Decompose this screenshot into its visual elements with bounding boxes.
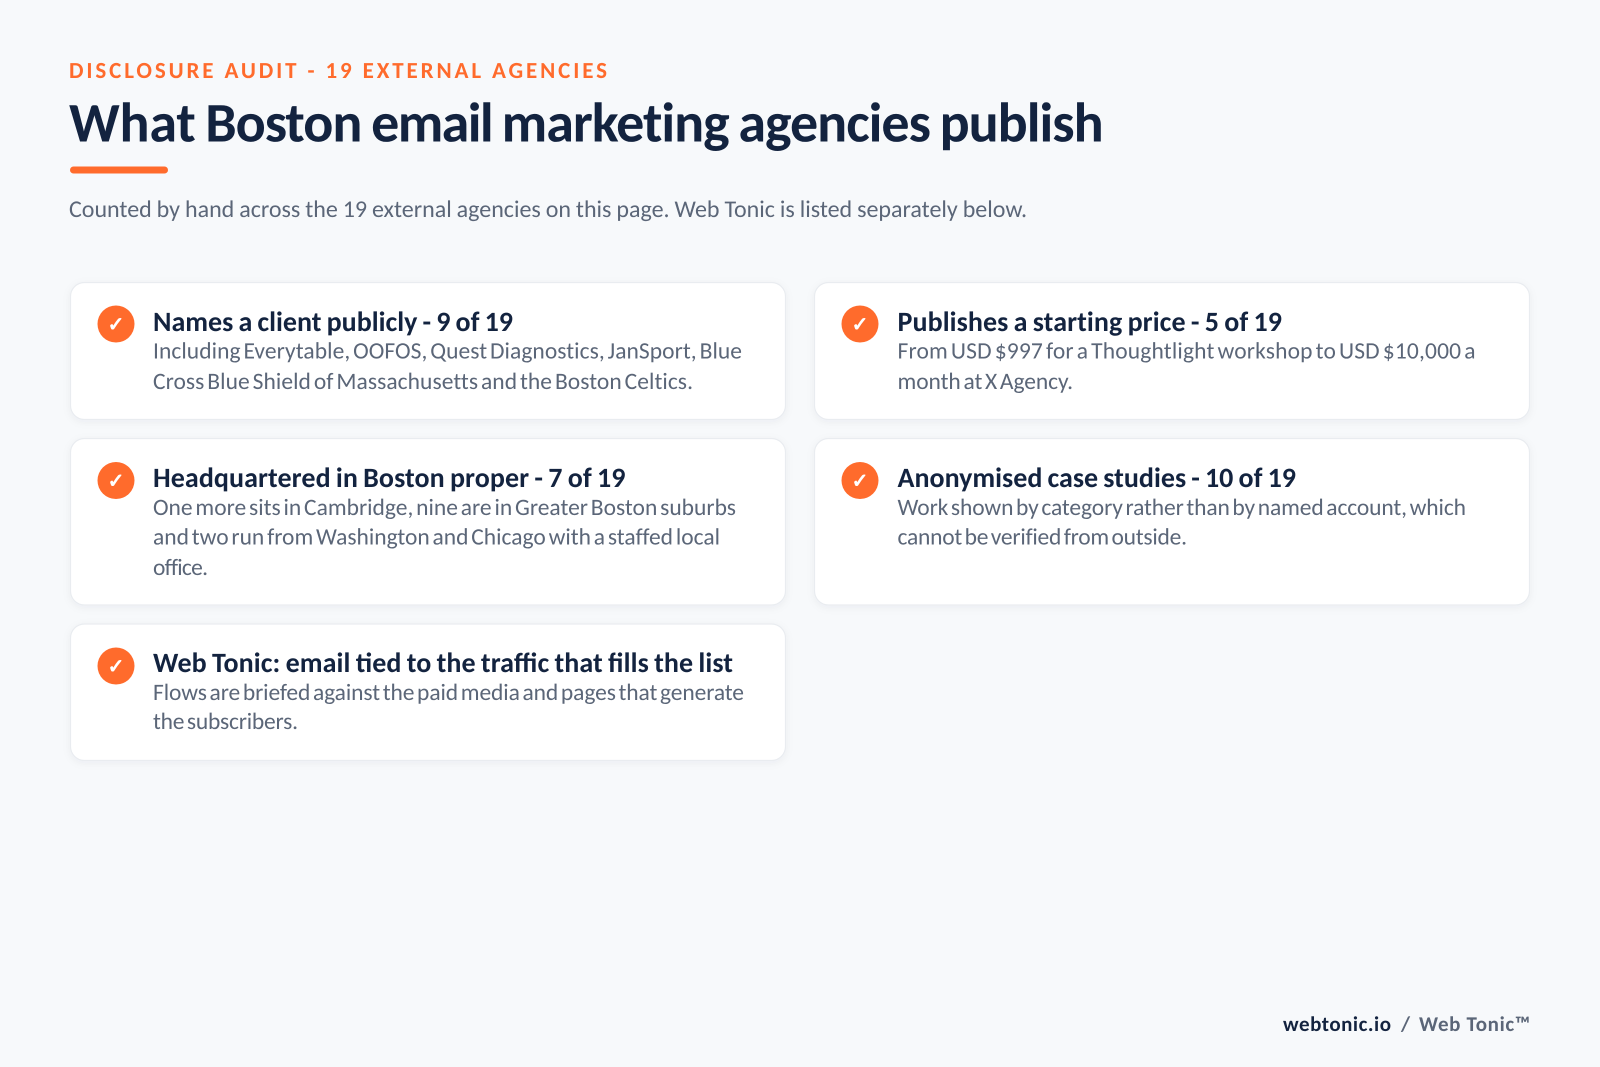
card heading: Headquartered in Boston proper - 7 of 19 bbox=[153, 460, 626, 495]
footer bbox=[1283, 1011, 1530, 1037]
panel: anonymised case studies bbox=[814, 438, 1530, 605]
icon: check badge: ✓ bbox=[852, 312, 868, 336]
card description: Work shown by category rather than by named account, which bbox=[898, 494, 1466, 522]
icon: check badge: ✓ bbox=[108, 468, 124, 492]
icon: check badge: ✓ bbox=[108, 654, 124, 678]
card description bbox=[153, 338, 742, 396]
card description bbox=[898, 338, 1476, 396]
panel: starting price bbox=[814, 282, 1530, 420]
card description bbox=[898, 494, 1466, 552]
card heading: Names a client publicly - 9 of 19 bbox=[153, 304, 513, 339]
icon: check badge: ✓ bbox=[852, 468, 868, 492]
panel: Web Tonic bbox=[70, 624, 786, 760]
icon: check badge bbox=[98, 306, 134, 342]
icon: check badge bbox=[842, 306, 878, 342]
card heading: Anonymised case studies - 10 of 19 bbox=[898, 460, 1296, 495]
card description bbox=[153, 494, 736, 582]
footer: webtonic.io bbox=[1283, 1011, 1391, 1037]
card description: From USD $997 for a Thoughtlight workshop to USD $10,000 a bbox=[898, 338, 1476, 366]
eyebrow label: DISCLOSURE AUDIT - 19 EXTERNAL AGENCIES bbox=[69, 57, 607, 85]
subtitle: Counted by hand across the 19 external agencies on this page. Web Tonic is listed separately below. bbox=[69, 195, 1027, 224]
footer: / bbox=[1400, 1011, 1411, 1037]
card heading: Web Tonic: email tied to the traffic that fills the list bbox=[153, 645, 733, 680]
title accent bar bbox=[70, 166, 168, 174]
card description: Flows are briefed against the paid media and pages that generate bbox=[153, 679, 744, 707]
panel: headquartered bbox=[70, 438, 786, 605]
icon: check badge bbox=[98, 648, 134, 684]
footer: Web Tonic™ bbox=[1419, 1011, 1530, 1037]
card description: month at X Agency. bbox=[898, 368, 1073, 396]
panel: names a client bbox=[70, 282, 786, 420]
icon: check badge: ✓ bbox=[108, 312, 124, 336]
card description: Cross Blue Shield of Massachusetts and the Boston Celtics. bbox=[153, 368, 693, 396]
card heading: Publishes a starting price - 5 of 19 bbox=[898, 304, 1282, 339]
card description: office. bbox=[153, 554, 208, 582]
card description: Including Everytable, OOFOS, Quest Diagnostics, JanSport, Blue bbox=[153, 338, 742, 366]
title: What Boston email marketing agencies publish bbox=[69, 90, 1103, 158]
card description: cannot be verified from outside. bbox=[898, 524, 1187, 552]
card description bbox=[153, 679, 744, 736]
icon: check badge bbox=[98, 462, 134, 499]
card description: One more sits in Cambridge, nine are in Greater Boston suburbs bbox=[153, 494, 736, 522]
icon: check badge bbox=[842, 462, 878, 499]
card description: the subscribers. bbox=[153, 708, 298, 736]
card description: and two run from Washington and Chicago with a staffed local bbox=[153, 524, 720, 552]
